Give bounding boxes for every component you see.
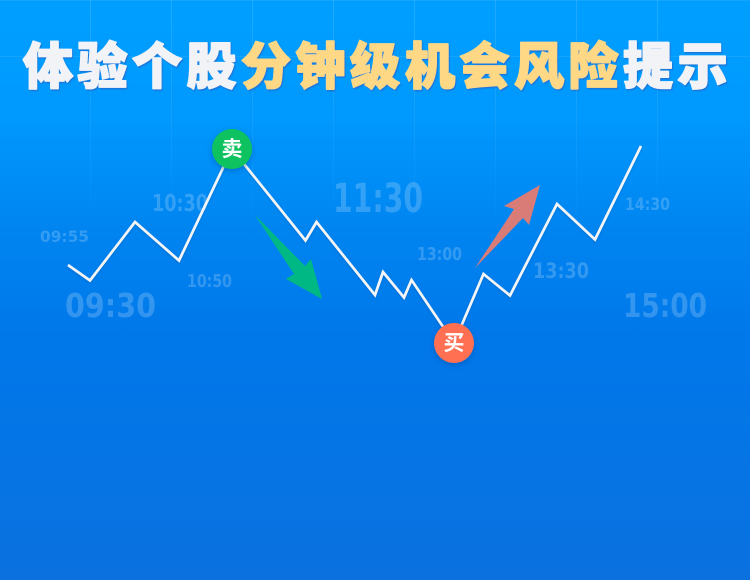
- title: 提示: [623, 39, 728, 95]
- time labels: 10:50: [187, 271, 232, 292]
- time labels: 09:55: [40, 227, 89, 246]
- marker: buy: [434, 323, 474, 363]
- marker: buy: 买: [444, 332, 464, 355]
- title: 分钟级机会风险: [241, 39, 618, 95]
- arrow: green down: [255, 215, 322, 299]
- marker: sell: 卖: [222, 138, 242, 161]
- marker: sell: [212, 129, 252, 169]
- price line: [68, 146, 641, 343]
- time labels: 11:30: [333, 176, 423, 222]
- time labels: 13:00: [417, 244, 462, 265]
- time labels: 09:30: [65, 286, 156, 325]
- time labels: 15:00: [623, 286, 707, 325]
- title: 体验个股: [23, 39, 236, 95]
- arrow: red up: [475, 185, 540, 268]
- time labels: [40, 176, 707, 325]
- time labels: 10:30: [152, 191, 208, 217]
- time labels: 14:30: [625, 195, 670, 215]
- time labels: 13:30: [533, 259, 589, 283]
